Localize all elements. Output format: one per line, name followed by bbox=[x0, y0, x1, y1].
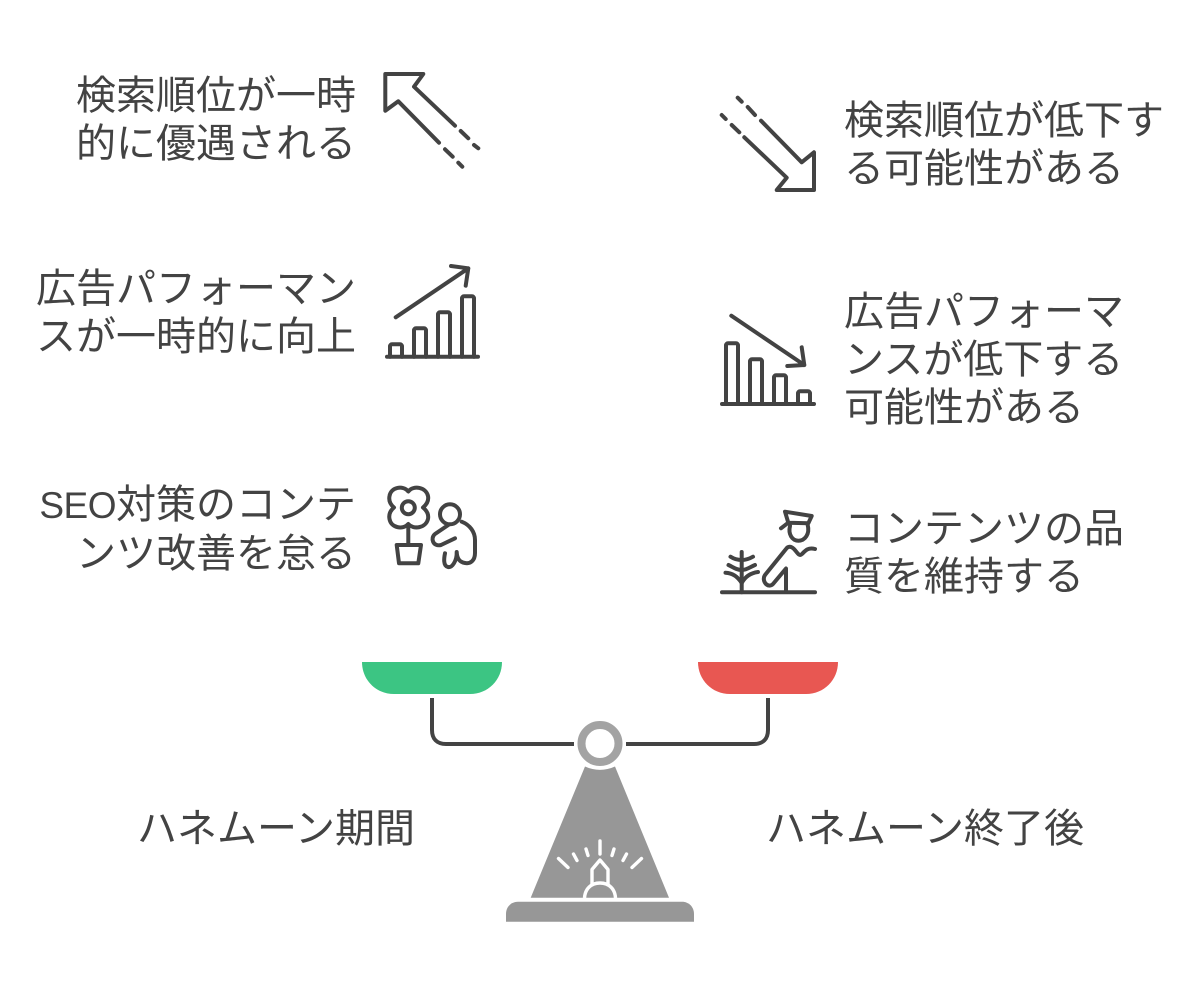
icon: falling bar chart bbox=[720, 314, 816, 406]
icon: arrow up-left bbox=[383, 72, 480, 169]
pivot ring bbox=[582, 725, 618, 762]
text: ad performance may drop: ンスが低下する bbox=[844, 338, 1123, 382]
text: ad performance may drop bbox=[844, 290, 1124, 430]
base bbox=[506, 902, 694, 922]
label: honeymoon period: ハネムーン期間 bbox=[137, 807, 415, 851]
text: search rank may drop: る可能性がある bbox=[844, 147, 1124, 191]
icon: arrow down-right bbox=[720, 96, 816, 192]
text: maintain content quality bbox=[844, 507, 1124, 599]
text: search rank preferred: 検索順位が一時 bbox=[76, 74, 356, 118]
left beam bbox=[432, 698, 574, 744]
text: ad performance may drop: 可能性がある bbox=[844, 386, 1084, 430]
balance scale bbox=[362, 662, 838, 922]
text: search rank preferred bbox=[76, 74, 356, 166]
text: ad performance improves bbox=[36, 267, 356, 359]
red pan bbox=[698, 662, 838, 694]
text: search rank may drop bbox=[844, 99, 1164, 191]
text: search rank preferred: 的に優遇される bbox=[76, 122, 356, 166]
text: neglecting SEO content bbox=[39, 483, 356, 576]
light icon on fulcrum bbox=[558, 841, 642, 898]
icon: gardener tending plant bbox=[720, 510, 817, 594]
label: after honeymoon: ハネムーン終了後 bbox=[766, 807, 1084, 851]
text: neglecting SEO content: SEO対策のコンテ bbox=[39, 483, 356, 527]
icon: rising bar chart bbox=[385, 264, 480, 359]
text: ad performance improves: スが一時的に向上 bbox=[36, 315, 356, 359]
text: maintain content quality: 質を維持する bbox=[844, 555, 1084, 599]
icon: neglected flower and person bbox=[387, 486, 477, 570]
green pan bbox=[362, 662, 502, 694]
text: ad performance improves: 広告パフォーマン bbox=[36, 267, 356, 311]
text: neglecting SEO content: ンツ改善を怠る bbox=[76, 532, 356, 576]
text: ad performance may drop: 広告パフォーマ bbox=[844, 290, 1124, 334]
text: maintain content quality: コンテンツの品 bbox=[844, 507, 1124, 551]
right beam bbox=[626, 698, 768, 744]
fulcrum bbox=[531, 766, 669, 898]
text: search rank may drop: 検索順位が低下す bbox=[844, 99, 1164, 143]
